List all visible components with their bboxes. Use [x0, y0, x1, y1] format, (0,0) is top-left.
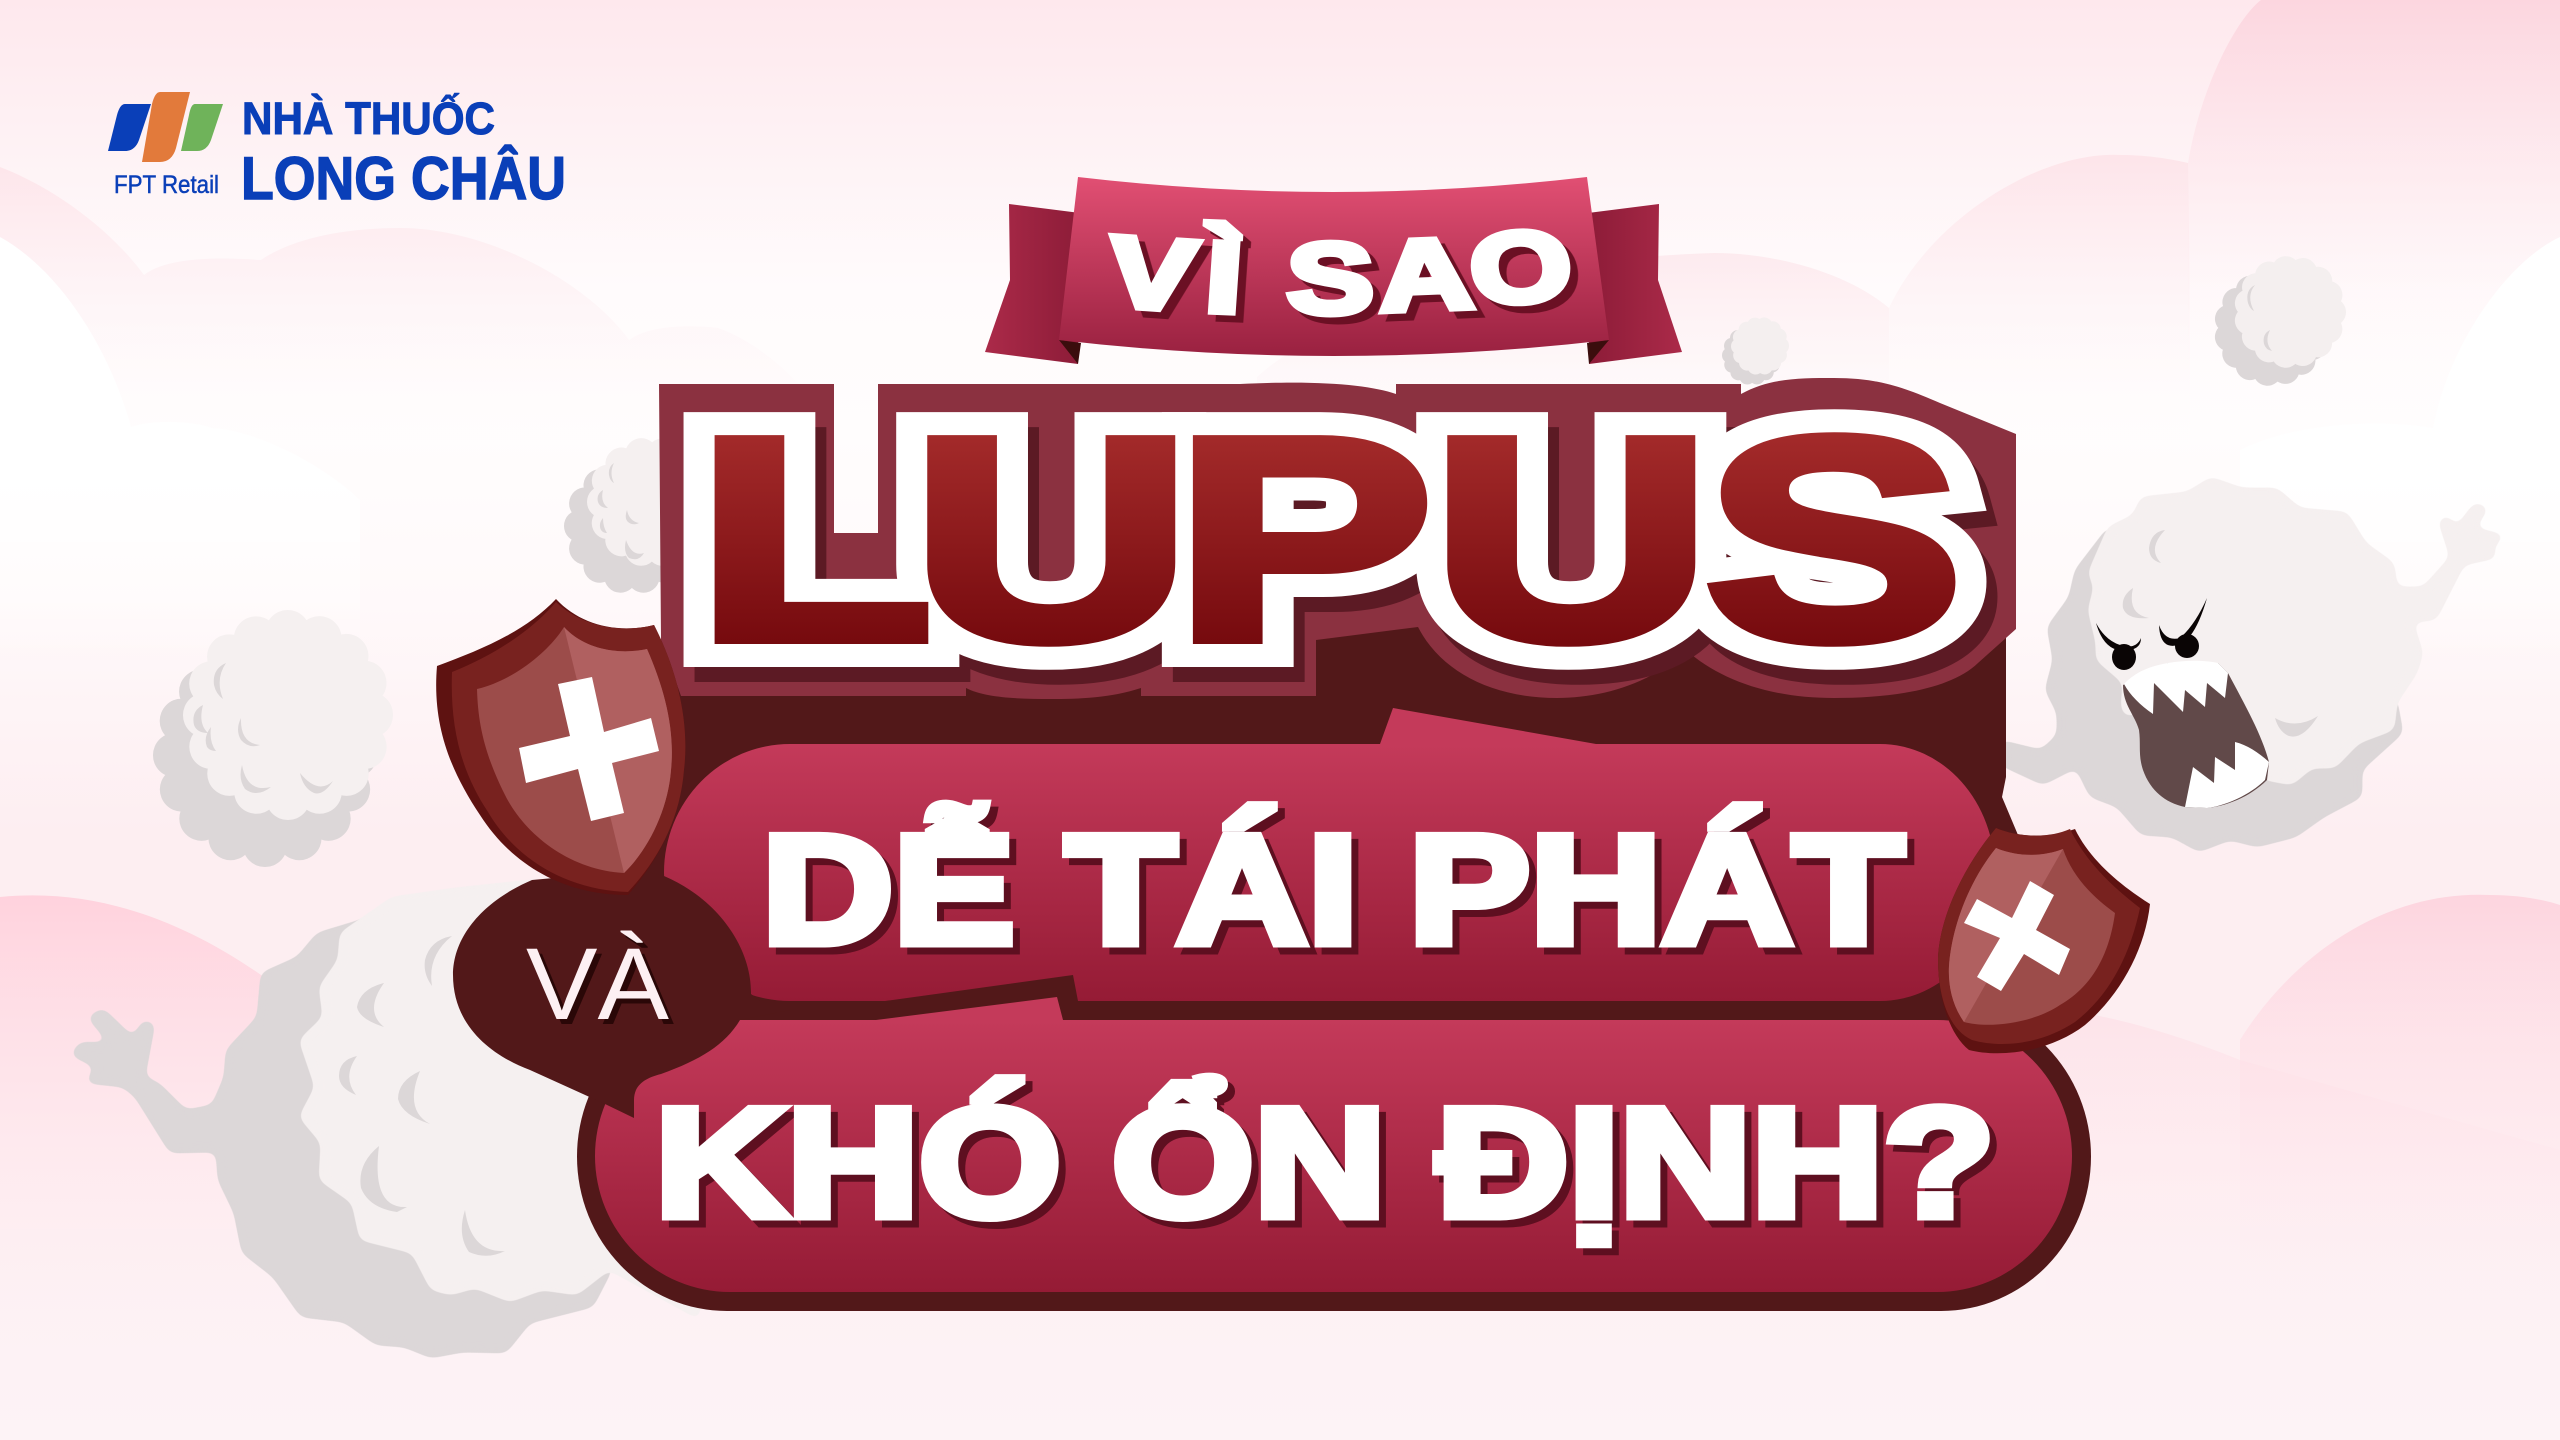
panel: line two pill [595, 997, 2072, 1292]
panel: line one pill [664, 708, 1995, 1001]
logo: FPT Retail Long Chau [108, 92, 566, 212]
logo: FPT Retail Long Chau: NHÀ THUỐC [242, 93, 495, 144]
panel: line two pill outline [577, 1002, 2091, 1311]
banner: VI SAO ribbon [985, 177, 1682, 364]
white blood cell: left large [175, 632, 371, 845]
title plate: dark backing [640, 600, 2030, 1030]
icon: left shield with plus [436, 599, 685, 895]
white blood cell: small behind title [1730, 325, 1781, 377]
title: LUPUS: LUPUS [706, 392, 1975, 715]
speech bubble: va [453, 870, 790, 1118]
monster eyes and brows [2096, 598, 2207, 651]
logo: FPT Retail Long Chau: LONG CHÂU [241, 145, 566, 212]
logo mark [108, 92, 223, 162]
banner text: VÌ SAO [1103, 208, 1577, 335]
icon: right shield with plus [1938, 828, 2150, 1053]
logo text: FPT Retail [114, 171, 219, 199]
monster teeth [2124, 661, 2269, 808]
bubble text: VÀ [526, 927, 669, 1041]
white blood cell: top right small [2228, 270, 2332, 372]
monster: right angry cell [2000, 477, 2506, 852]
heading: de tai phat: DỄ TÁI PHÁT [762, 803, 1904, 976]
monster: lower left shadow and body [70, 880, 700, 1358]
heading: kho on dinh: KHÓ ỔN ĐỊNH? [655, 1076, 1995, 1249]
monster mouth [2123, 663, 2269, 808]
white blood cell: behind title left [580, 453, 701, 578]
title: LUPUS: LUPUS [695, 377, 1964, 700]
title plate: raised outline band [659, 378, 2016, 699]
title: LUPUS: LUPUS [695, 377, 1964, 700]
